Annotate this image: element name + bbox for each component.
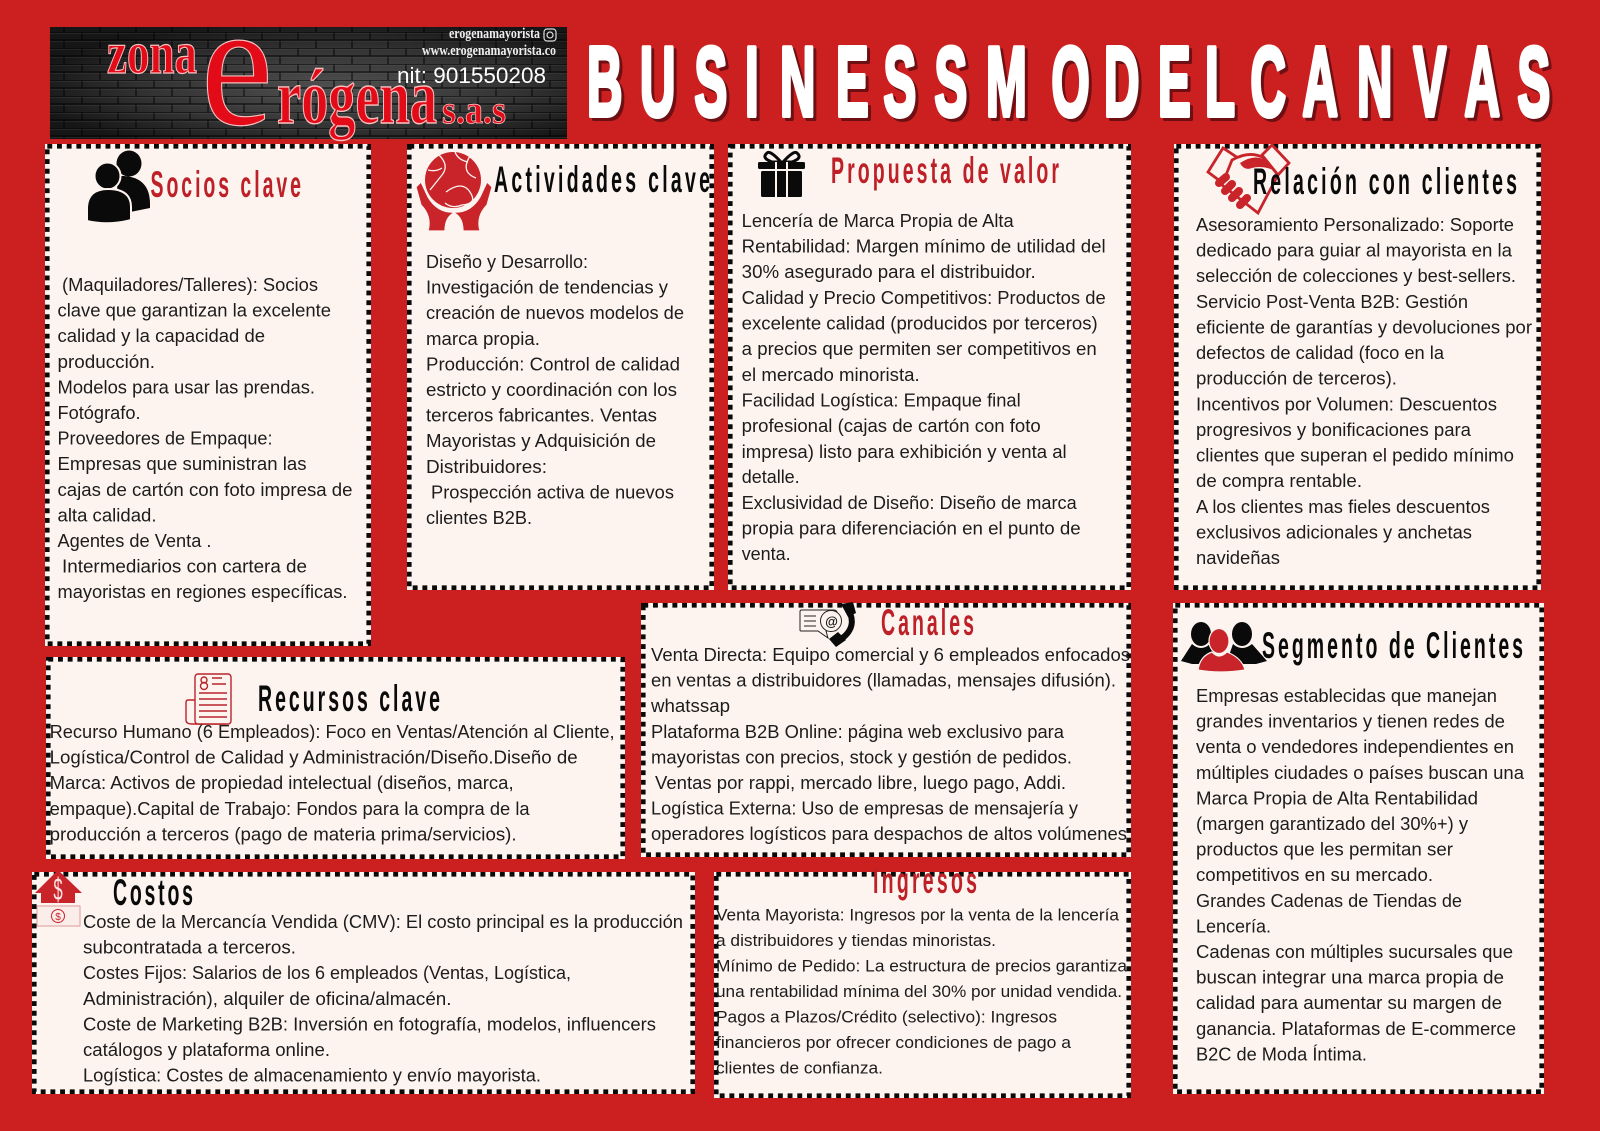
- body text: Diseño y Desarrollo:: [426, 252, 588, 272]
- heading: Canales: [881, 602, 974, 644]
- body text: Coste de la Mercancía Vendida (CMV): El costo principal es la producción: [83, 912, 683, 932]
- website: www.erogenamayorista.co: [422, 43, 556, 59]
- body text: Producción: Control de calidad: [426, 354, 680, 374]
- body text: alta calidad.: [58, 505, 156, 525]
- body text: competitivos en su mercado.: [1196, 865, 1433, 885]
- panel: costos: [32, 870, 695, 1094]
- body text: catálogos y plataforma online.: [83, 1040, 330, 1060]
- body text: creación de nuevos modelos de: [426, 303, 684, 323]
- body text: Prospección activa de nuevos: [431, 482, 674, 502]
- body text: Distribuidores:: [426, 457, 547, 477]
- body text: Rentabilidad: Margen mínimo de utilidad del: [742, 237, 1106, 257]
- body text: marca propia.: [426, 329, 540, 349]
- body text: buscan integrar una marca propia de: [1196, 968, 1504, 988]
- body text: Ventas por rappi, mercado libre, luego pago, Addi.: [655, 773, 1066, 793]
- instagram handle: erogenamayorista: [449, 26, 540, 42]
- body text: Calidad y Precio Competitivos: Productos de: [742, 288, 1106, 308]
- body text: progresivos y bonificaciones para: [1196, 420, 1472, 440]
- body text: [426, 252, 684, 528]
- body text: profesional (cajas de cartón con foto: [742, 416, 1041, 436]
- icon: globe in hands: [416, 152, 492, 231]
- panel: ingresos: [714, 860, 1131, 1098]
- body text: A los clientes mas fieles descuentos: [1196, 497, 1490, 517]
- body text: [742, 211, 1106, 564]
- body text: propia para diferenciación en el punto de: [742, 518, 1081, 538]
- body text: a precios que permiten ser competitivos en: [742, 339, 1097, 359]
- heading: Costos: [113, 872, 193, 914]
- body text: [650, 645, 1130, 844]
- body text: Coste de Marketing B2B: Inversión en fotografía, modelos, influencers: [83, 1014, 656, 1034]
- icon: gift: [758, 152, 805, 197]
- body text: [50, 722, 615, 844]
- panel: relacion con clientes: [1174, 144, 1541, 590]
- body text: impresa) listo para exhibición y venta al: [742, 442, 1067, 462]
- body text: Proveedores de Empaque:: [58, 429, 272, 449]
- body text: venta.: [742, 544, 791, 564]
- body text: Plataforma B2B Online: página web exclusivo para: [651, 722, 1065, 742]
- logo word: s.a.s: s.a.s: [442, 87, 506, 132]
- body text: Agentes de Venta .: [58, 531, 212, 551]
- body text: [716, 906, 1128, 1078]
- body text: Modelos para usar las prendas.: [58, 377, 315, 397]
- body text: clientes B2B.: [426, 508, 532, 528]
- heading: Actividades clave: [494, 159, 710, 201]
- body text: mayoristas en regiones específicas.: [58, 582, 348, 602]
- body text: Pagos a Plazos/Crédito (selectivo): Ingresos: [716, 1008, 1057, 1026]
- body text: (margen garantizado del 30%+) y: [1196, 814, 1468, 834]
- icon: customers: [1181, 622, 1267, 672]
- body text: calidad para aumentar su margen de: [1196, 993, 1502, 1013]
- body text: el mercado minorista.: [742, 365, 920, 385]
- panel: propuesta de valor: [728, 144, 1131, 590]
- body text: Venta Directa: Equipo comercial y 6 empleados enfocados: [651, 645, 1130, 665]
- body text: clave que garantizan la excelente: [58, 301, 331, 321]
- icon: house and banknote: $: [53, 873, 63, 907]
- body text: Lencería de Marca Propia de Alta: [742, 211, 1015, 231]
- body text: defectos de calidad (foco en la: [1196, 343, 1445, 363]
- body text: productos que les permitan ser: [1196, 840, 1453, 860]
- body text: [83, 912, 683, 1086]
- body text: cajas de cartón con foto impresa de: [58, 480, 352, 500]
- body text: Intermediarios con cartera de: [62, 557, 307, 577]
- body text: venta o vendedores independientes en: [1196, 737, 1514, 757]
- body text: Empresas que suministran las: [58, 454, 306, 474]
- body text: múltiples ciudades o países buscan una: [1196, 763, 1525, 783]
- body text: Logística/Control de Calidad y Administración/Diseño.Diseño de: [50, 748, 578, 768]
- icon: phone and message: @: [825, 614, 838, 629]
- body text: calidad y la capacidad de: [58, 326, 265, 346]
- body text: dedicado para guiar al mayorista en la: [1196, 241, 1513, 261]
- title: BUSINESSMODELCANVAS: [587, 28, 1550, 137]
- body text: terceros fabricantes. Ventas: [426, 406, 657, 426]
- body text: clientes que superan el pedido mínimo: [1196, 446, 1514, 466]
- body text: exclusivos adicionales y anchetas: [1196, 523, 1472, 543]
- body text: Mínimo de Pedido: La estructura de precios garantiza: [716, 956, 1128, 976]
- body text: detalle.: [742, 467, 800, 487]
- body text: Fotógrafo.: [58, 403, 140, 423]
- body text: Grandes Cadenas de Tiendas de: [1196, 891, 1462, 911]
- body text: [1196, 686, 1525, 1064]
- body text: Marca Propia de Alta Rentabilidad: [1196, 788, 1478, 808]
- body text: Investigación de tendencias y: [426, 278, 668, 298]
- heading: Ingresos: [873, 860, 977, 902]
- body text: Venta Mayorista: Ingresos por la venta de la lencería: [716, 906, 1120, 924]
- heading: Propuesta de valor: [831, 150, 1059, 192]
- body text: una rentabilidad mínima del 30% por unidad vendida.: [716, 982, 1122, 1001]
- icon: house and banknote: $: [55, 912, 61, 923]
- body text: eficiente de garantías y devoluciones por: [1196, 317, 1532, 337]
- body text: en ventas a distribuidores (llamadas, mensajes difusión).: [651, 671, 1116, 691]
- body text: subcontratada a terceros.: [83, 938, 296, 958]
- icon: house and banknote: [35, 870, 82, 926]
- body text: B2C de Moda Íntima.: [1196, 1044, 1367, 1064]
- body text: Costes Fijos: Salarios de los 6 empleados (Ventas, Logística,: [83, 963, 571, 983]
- panel: actividades clave: [407, 144, 714, 590]
- body text: estricto y coordinación con los: [426, 380, 677, 400]
- heading: Relación con clientes: [1253, 161, 1517, 203]
- icon: document: [186, 674, 231, 724]
- body text: whatssap: [650, 696, 730, 716]
- panel: socios clave: [45, 144, 371, 646]
- body text: excelente calidad (producidos por terceros): [742, 313, 1098, 333]
- logo word: rogena: rógena: [277, 53, 437, 140]
- body text: Administración), alquiler de oficina/almacén.: [83, 989, 452, 1009]
- icon: phone and message: [800, 602, 856, 647]
- panel: recursos clave: [46, 657, 625, 859]
- body text: producción de terceros).: [1196, 369, 1397, 389]
- body text: Empresas establecidas que manejan: [1196, 686, 1497, 706]
- body text: [1196, 215, 1532, 568]
- heading: Segmento de Clientes: [1262, 625, 1523, 667]
- body text: Marca: Activos de propiedad intelectual (diseños, marca,: [50, 773, 514, 793]
- body text: [58, 275, 352, 602]
- body text: financieros por ofrecer condiciones de pago a: [716, 1033, 1072, 1052]
- heading: Recursos clave: [258, 678, 440, 720]
- body text: empaque).Capital de Trabajo: Fondos para la compra de la: [50, 799, 531, 819]
- logo word: zona: zona: [107, 20, 197, 86]
- body text: Asesoramiento Personalizado: Soporte: [1196, 215, 1514, 235]
- panel: segmento de clientes: [1173, 603, 1544, 1094]
- body text: Logística Externa: Uso de empresas de mensajería y: [651, 799, 1078, 819]
- body text: selección de colecciones y best-sellers.: [1196, 266, 1516, 286]
- icon: handshake: [1208, 145, 1289, 213]
- heading: Socios clave: [150, 164, 301, 206]
- body text: ganancia. Plataformas de E-commerce: [1196, 1019, 1516, 1039]
- body text: Incentivos por Volumen: Descuentos: [1196, 394, 1497, 414]
- body text: Recurso Humano (6 Empleados): Foco en Ventas/Atención al Cliente,: [50, 722, 615, 742]
- body text: (Maquiladores/Talleres): Socios: [62, 275, 318, 295]
- body text: 30% asegurado para el distribuidor.: [742, 262, 1036, 282]
- body text: Facilidad Logística: Empaque final: [742, 391, 1021, 411]
- body text: Logística: Costes de almacenamiento y envío mayorista.: [83, 1066, 541, 1086]
- body text: grandes inventarios y tienen redes de: [1196, 712, 1505, 732]
- tax id: nit: 901550208: [397, 63, 546, 88]
- body text: Cadenas con múltiples sucursales que: [1196, 942, 1513, 962]
- body text: de compra rentable.: [1196, 471, 1362, 491]
- body text: operadores logísticos para despachos de altos volúmenes: [651, 824, 1127, 844]
- body text: a distribuidores y tiendas minoristas.: [716, 931, 996, 950]
- body text: Lencería.: [1196, 916, 1271, 936]
- logo banner: [50, 0, 567, 163]
- body text: producción.: [58, 352, 155, 372]
- body text: Mayoristas y Adquisición de: [426, 431, 656, 451]
- body text: Exclusividad de Diseño: Diseño de marca: [742, 493, 1078, 513]
- body text: mayoristas con precios, stock y gestión de pedidos.: [651, 747, 1072, 767]
- body text: navideñas: [1196, 548, 1280, 568]
- body text: producción a terceros (pago de materia prima/servicios).: [50, 824, 517, 844]
- body text: Servicio Post-Venta B2B: Gestión: [1196, 292, 1468, 312]
- icon: people: [87, 150, 150, 223]
- panel: canales: [641, 602, 1131, 857]
- body text: clientes de confianza.: [716, 1058, 883, 1078]
- icon: instagram: [544, 29, 556, 41]
